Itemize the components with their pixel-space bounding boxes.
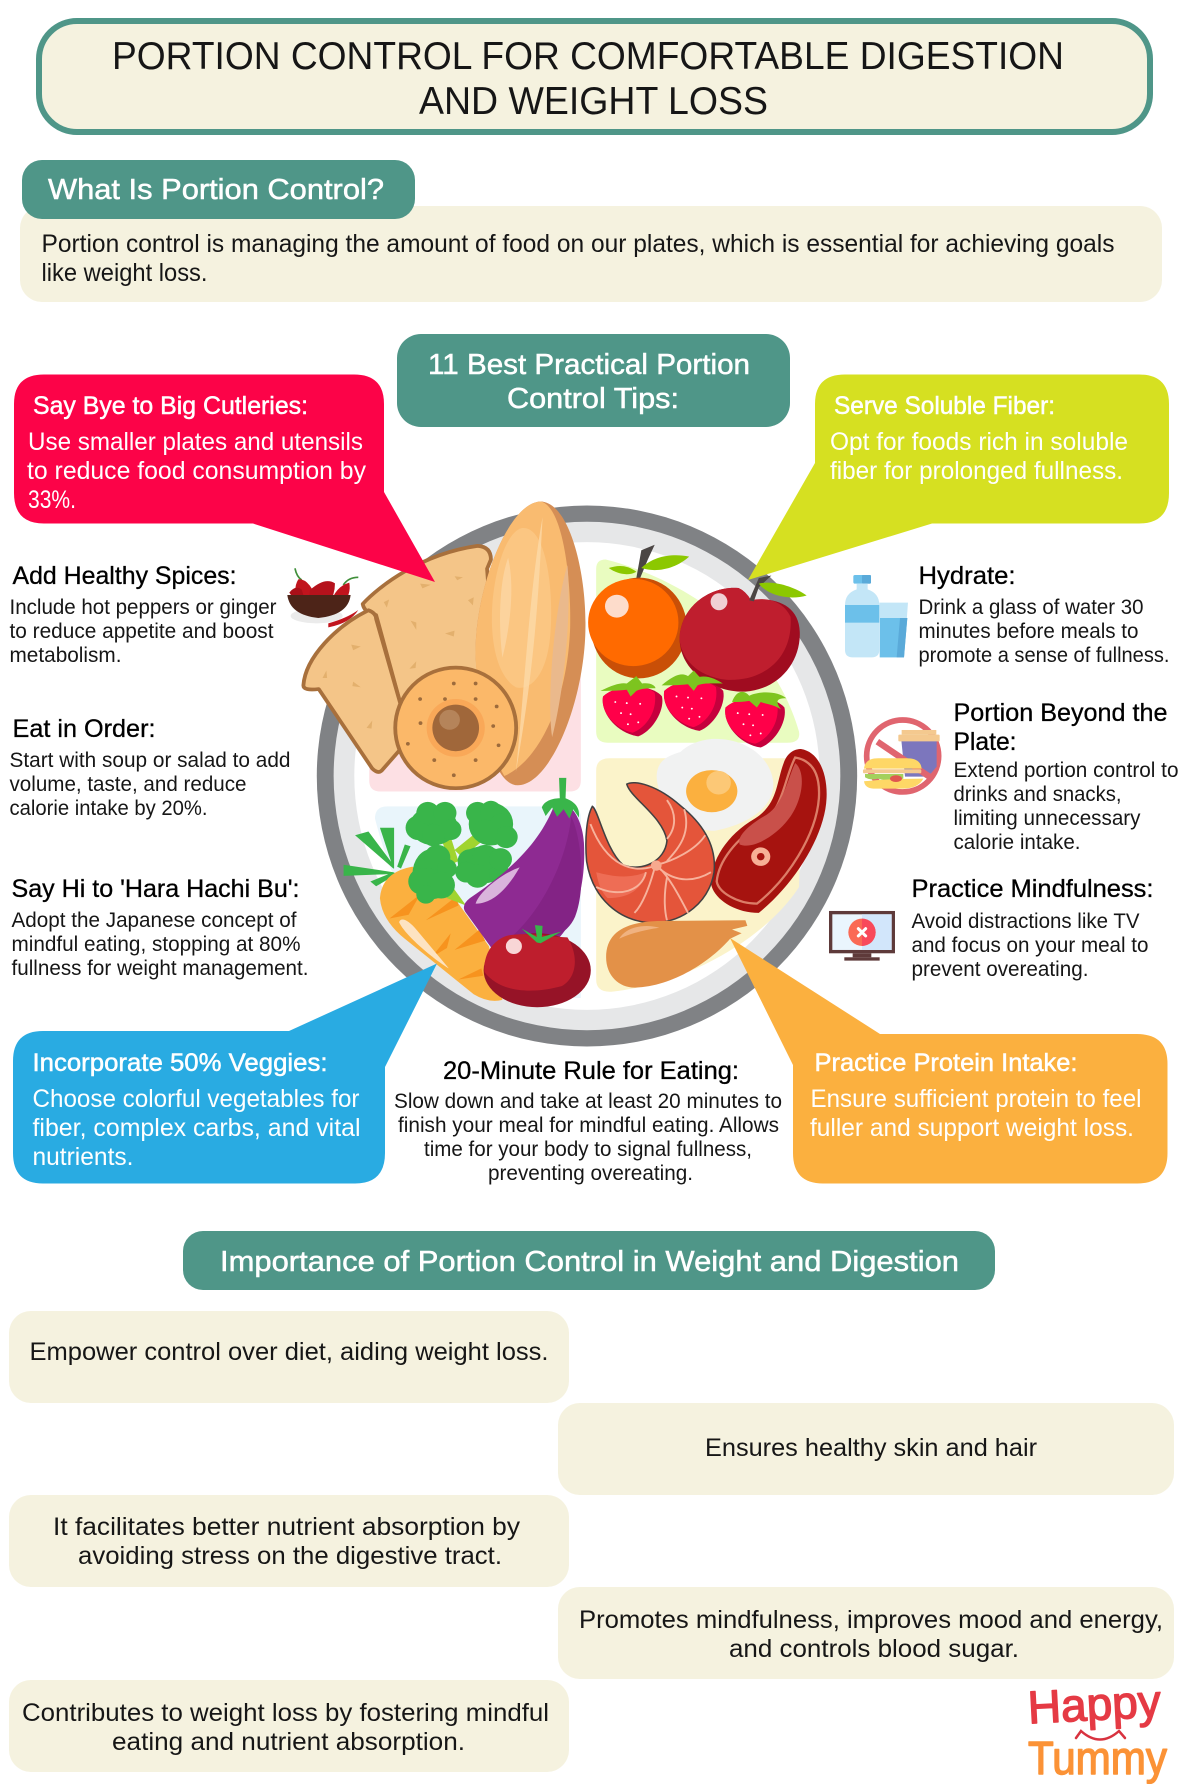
logo: Happy Tummy: Tummy	[1028, 1732, 1167, 1784]
callout: serve soluble fiber	[748, 374, 1169, 580]
tip: add healthy spices: metabolism.	[10, 644, 122, 667]
tip: practice mindfulness: and focus on your meal to	[912, 934, 1148, 957]
tip: portion beyond the plate: Portion Beyond the	[954, 699, 1168, 727]
tip: practice mindfulness	[912, 875, 1154, 981]
tip: practice mindfulness: prevent overeating.	[912, 958, 1088, 981]
tip: eat in order: volume, taste, and reduce	[10, 773, 246, 796]
heading: 11 best tips: Control Tips:	[507, 383, 679, 415]
tip: add healthy spices: to reduce appetite and boost	[10, 620, 274, 643]
callout text: to reduce food consumption by	[27, 457, 366, 485]
protein section	[596, 758, 803, 992]
benefit card 3	[9, 1495, 569, 1587]
tip: eat in order: Eat in Order:	[12, 715, 156, 743]
broccoli	[406, 801, 518, 906]
icon: chili peppers	[287, 568, 358, 627]
benefit card 2: Ensures healthy skin and hair	[705, 1434, 1037, 1462]
icon: water bottle and glass	[845, 575, 908, 657]
tip: hydrate	[918, 562, 1170, 667]
callout: practice protein intake	[730, 938, 1168, 1184]
tip: hara hachi bu	[12, 875, 308, 980]
bread slice back	[363, 546, 497, 706]
tip: 20-minute rule: Slow down and take at least 20 minutes to	[394, 1090, 782, 1113]
tip: add healthy spices	[10, 562, 277, 667]
icon: plate with food	[303, 501, 857, 1046]
tip: hydrate: Hydrate:	[918, 562, 1016, 590]
benefit card 5: eating and nutrient absorption.	[112, 1728, 465, 1756]
carrot	[344, 828, 502, 1001]
tip: portion beyond the plate: limiting unnecessary	[954, 807, 1141, 830]
title panel	[39, 21, 1150, 132]
tip: hydrate: minutes before meals to	[918, 620, 1138, 643]
logo: Happy Tummy	[1026, 1675, 1167, 1784]
callout text: fiber, complex carbs, and vital	[32, 1114, 360, 1142]
tip: practice mindfulness: Avoid distractions like TV	[912, 910, 1140, 933]
title	[112, 35, 1064, 123]
tip: add healthy spices: Add Healthy Spices:	[12, 562, 236, 590]
benefit card 4	[558, 1587, 1174, 1679]
callout heading: Serve Soluble Fiber:	[834, 392, 1055, 420]
callout text: Opt for foods rich in soluble	[830, 428, 1128, 456]
tip: 20-minute rule: preventing overeating.	[488, 1162, 693, 1185]
callout text: Ensure sufficient protein to feel	[810, 1085, 1142, 1113]
title: PORTION CONTROL FOR COMFORTABLE DIGESTION	[112, 35, 1064, 78]
tip: portion beyond the plate	[954, 699, 1178, 854]
benefit card 5: Contributes to weight loss by fostering mindful	[22, 1699, 549, 1727]
tip: eat in order: Start with soup or salad to add	[10, 749, 290, 772]
tip: add healthy spices: Include hot peppers or ginger	[10, 596, 277, 619]
tip: practice mindfulness: Practice Mindfulness:	[912, 875, 1154, 903]
fruit section	[596, 560, 799, 743]
tip: portion beyond the plate: Extend portion control to	[954, 759, 1178, 782]
grain section	[369, 591, 581, 792]
callout text: Use smaller plates and utensils	[28, 428, 363, 456]
apple	[680, 575, 807, 692]
tip: hydrate: Drink a glass of water 30	[918, 596, 1144, 619]
callout heading: Say Bye to Big Cutleries:	[33, 392, 308, 420]
benefit card 4: and controls blood sugar.	[729, 1635, 1019, 1663]
logo: Happy Tummy: Happy	[1026, 1675, 1162, 1733]
callout text	[27, 428, 366, 514]
callout text	[32, 1085, 360, 1171]
definition text: Portion control is managing the amount of food on our plates, which is essential for achieving goals	[42, 230, 1114, 258]
tomato	[484, 925, 591, 1007]
benefit card 5	[9, 1680, 569, 1772]
heading: importance: Importance of Portion Control in Weight and Digestion	[220, 1246, 959, 1278]
benefit card 4: Promotes mindfulness, improves mood and energy,	[579, 1606, 1163, 1634]
tip: portion beyond the plate: drinks and snacks,	[954, 783, 1122, 806]
heading: 11 best tips	[397, 334, 790, 427]
title: AND WEIGHT LOSS	[419, 80, 768, 123]
callout heading: Practice Protein Intake:	[814, 1049, 1078, 1077]
callout text	[810, 1085, 1142, 1142]
vegetable section	[375, 806, 581, 998]
tip: 20-minute rule: 20-Minute Rule for Eating:	[443, 1057, 739, 1085]
definition text: like weight loss.	[42, 259, 208, 287]
heading: what is portion control	[22, 160, 415, 219]
benefit card 1	[9, 1311, 569, 1403]
tip: hara hachi bu: Say Hi to 'Hara Hachi Bu':	[12, 875, 300, 903]
heading: what is portion control: What Is Portion Control?	[48, 174, 384, 206]
tip: eat in order: calorie intake by 20%.	[10, 797, 208, 820]
tip: hara hachi bu: mindful eating, stopping at 80%	[12, 933, 300, 956]
callout heading: Incorporate 50% Veggies:	[32, 1049, 328, 1077]
callout text: fiber for prolonged fullness.	[830, 457, 1123, 485]
definition text	[42, 230, 1114, 287]
heading: 11 best tips: 11 Best Practical Portion	[428, 349, 750, 381]
tip: 20-minute rule: time for your body to signal fullness,	[424, 1138, 752, 1161]
callout: incorporate 50% veggies	[13, 964, 437, 1184]
eggplant	[464, 778, 584, 950]
icon: television	[829, 911, 895, 961]
callout: say bye to big cutleries	[14, 374, 435, 582]
panel: what is portion control	[20, 160, 1162, 302]
tip: eat in order	[10, 715, 290, 820]
fried egg	[657, 739, 773, 831]
bread slice front	[303, 610, 403, 772]
benefit card 3: avoiding stress on the digestive tract.	[78, 1542, 502, 1570]
tip: portion beyond the plate: calorie intake.	[954, 831, 1080, 854]
chicken drumstick	[606, 920, 747, 988]
callout text: nutrients.	[32, 1143, 134, 1171]
tip: 20-minute rule: finish your meal for mindful eating. Allows	[398, 1114, 779, 1137]
orange	[588, 545, 689, 678]
tip: 20-minute rule	[394, 1057, 782, 1185]
tip: hara hachi bu: Adopt the Japanese concept of	[12, 909, 297, 932]
tip: hara hachi bu: fullness for weight management.	[12, 957, 308, 980]
strawberries	[600, 671, 786, 748]
baguette	[476, 501, 585, 785]
steak	[711, 749, 827, 913]
benefit card 1: Empower control over diet, aiding weight loss.	[30, 1338, 548, 1366]
callout text: fuller and support weight loss.	[810, 1114, 1134, 1142]
callout text: 33%.	[28, 486, 76, 514]
benefit card 3: It facilitates better nutrient absorption by	[53, 1513, 521, 1541]
heading: importance	[183, 1231, 995, 1290]
tip: hydrate: promote a sense of fullness.	[918, 644, 1170, 667]
salmon	[586, 783, 714, 923]
plate	[317, 506, 857, 1046]
tip: portion beyond the plate: Plate:	[954, 728, 1016, 756]
benefit card 2	[558, 1403, 1174, 1495]
bagel	[395, 668, 516, 788]
icon: no snacks	[863, 720, 940, 792]
callout text	[830, 428, 1128, 485]
callout text: Choose colorful vegetables for	[32, 1085, 360, 1113]
